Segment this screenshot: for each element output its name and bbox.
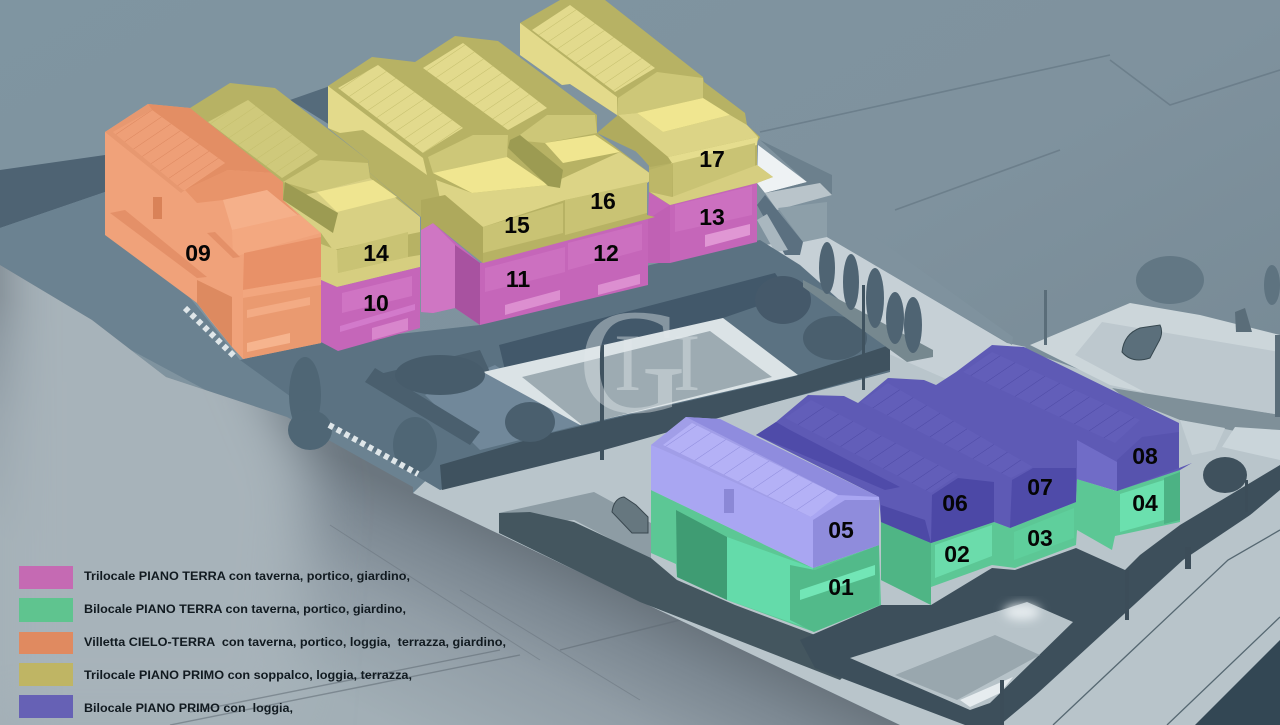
unit number labels: 07 <box>1027 474 1053 500</box>
hedge on roof terrace <box>283 182 338 233</box>
watermark logo: I <box>614 317 641 408</box>
building block north: pink units 11 12 13 <box>421 183 757 325</box>
watermark logo: G <box>578 279 686 445</box>
legend item: trilocale piano primo: Trilocale PIANO PRIMO con soppalco, loggia, terrazza, <box>84 670 412 682</box>
unit number labels: 14 <box>363 240 389 266</box>
building block south: blue units 06 07 08 <box>756 345 1192 543</box>
legend item: villetta cielo-terra: Villetta CIELO-TERRA con taverna, portico, loggia, terrazza, giardino, <box>84 637 506 649</box>
unit number labels: 13 <box>699 204 725 230</box>
building block north: yellow unit 14 <box>190 83 420 287</box>
unit number labels: 15 <box>504 212 530 238</box>
building block north: villa 09 <box>105 104 321 359</box>
building block north: yellow units 15 16 <box>328 36 655 263</box>
roof panels <box>785 352 1140 493</box>
unit number labels: 11 <box>506 266 530 292</box>
legend <box>19 566 506 718</box>
unit number labels: 06 <box>942 490 968 516</box>
unit number labels: 03 <box>1027 525 1053 551</box>
unit number labels: 01 <box>828 574 854 600</box>
roof of villa 09 <box>105 104 283 193</box>
building block south: green units 02 03 04 <box>881 470 1180 605</box>
legend item: villetta cielo-terra <box>19 632 506 654</box>
unit number labels <box>185 146 1158 600</box>
legend item: bilocale piano primo: Bilocale PIANO PRIMO con loggia, <box>84 703 293 715</box>
watermark logo: I <box>673 317 700 408</box>
legend item: bilocale piano terra: Bilocale PIANO TERRA con taverna, portico, giardino, <box>84 604 406 616</box>
unit number labels: 12 <box>593 240 619 266</box>
unit number labels: 04 <box>1132 490 1158 516</box>
unit number labels: 10 <box>363 290 389 316</box>
unit number labels: 05 <box>828 517 854 543</box>
building block south: blue unit 05 <box>651 417 879 568</box>
unit number labels: 02 <box>944 541 970 567</box>
unit number labels: 09 <box>185 240 211 266</box>
building block north: yellow unit 17 <box>520 0 773 205</box>
unit number labels: 08 <box>1132 443 1158 469</box>
legend item: trilocale piano terra: Trilocale PIANO TERRA con taverna, portico, giardino, <box>84 571 410 583</box>
legend item: bilocale piano primo <box>19 695 293 718</box>
unit number labels: 16 <box>590 188 616 214</box>
retaining wall and ramp <box>757 140 1026 382</box>
hedge box with car <box>499 492 881 680</box>
legend item: bilocale piano terra <box>19 598 406 622</box>
legend item: trilocale piano terra <box>19 566 410 589</box>
legend item: trilocale piano primo <box>19 663 412 686</box>
building block south: green unit 01 <box>651 490 881 632</box>
building block north: pink unit 10 <box>321 267 420 351</box>
unit number labels: 17 <box>699 146 725 172</box>
